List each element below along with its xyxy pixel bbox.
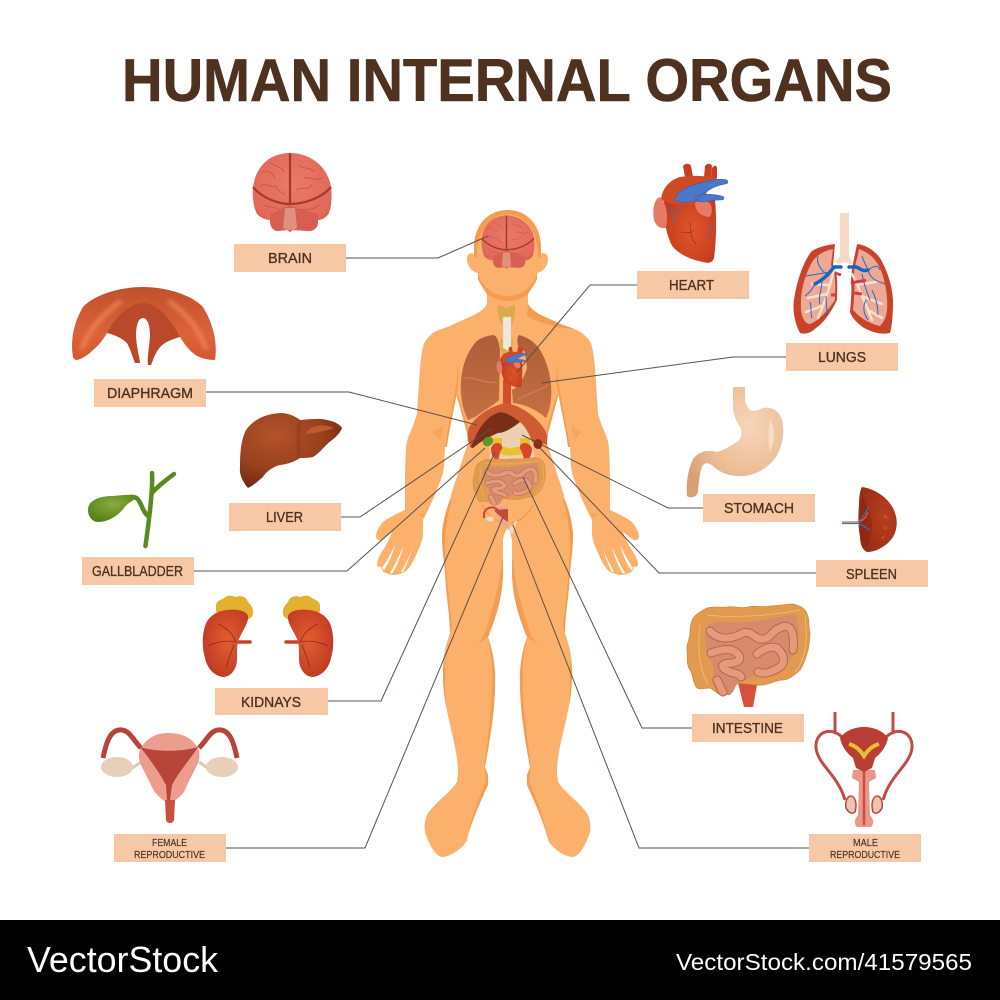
title: HUMAN INTERNAL ORGANS xyxy=(122,47,892,114)
label: heart: HEART xyxy=(669,277,714,294)
male reproductive in body xyxy=(509,521,516,534)
label: kidneys: KIDNAYS xyxy=(241,694,301,711)
label: gallbladder xyxy=(82,557,194,585)
testes xyxy=(846,796,882,813)
label: stomach: STOMACH xyxy=(724,500,794,517)
gallbladder in body xyxy=(481,435,495,448)
trachea xyxy=(835,213,853,264)
icon: stomach xyxy=(687,387,783,497)
label: lungs: LUNGS xyxy=(818,349,866,366)
trachea xyxy=(503,317,511,350)
lungs in body xyxy=(461,335,551,420)
icon: spleen xyxy=(842,487,897,552)
vaginal canal xyxy=(165,800,175,823)
heart in body xyxy=(497,347,527,387)
liver under diaphragm xyxy=(470,412,520,448)
left kidney and adrenal xyxy=(203,596,253,677)
leader lines xyxy=(194,236,816,848)
pulmonary veins xyxy=(675,179,728,202)
label: gallbladder: GALLBLADDER xyxy=(92,563,183,580)
bladder and prostate xyxy=(840,727,888,772)
label: liver: LIVER xyxy=(266,509,303,526)
icon: female reproductive organs xyxy=(101,730,238,823)
lung shading xyxy=(463,378,549,400)
right kidney and adrenal xyxy=(283,596,333,677)
right lung xyxy=(850,244,893,334)
label: kidneys xyxy=(215,688,328,715)
label: spleen: SPLEEN xyxy=(846,566,897,583)
icon: male reproductive organs xyxy=(816,712,912,827)
icon: intestine with rectum xyxy=(687,604,810,707)
pulmonary arteries xyxy=(815,267,868,284)
aortic arch xyxy=(661,176,718,205)
small intestine base xyxy=(705,614,799,695)
human body figure xyxy=(376,210,639,857)
left lung xyxy=(793,244,837,334)
diaphragm central tendon xyxy=(107,303,180,365)
brain in head xyxy=(482,216,534,268)
label: female reproductive: FEMALE xyxy=(152,838,187,849)
colon seam xyxy=(699,610,806,684)
label: intestine xyxy=(692,714,804,742)
label: male reproductive: REPRODUCTIVE xyxy=(830,850,900,861)
label: female reproductive: REPRODUCTIVE xyxy=(134,850,205,861)
label: spleen xyxy=(816,560,928,587)
neck shadow xyxy=(527,304,575,329)
ligaments xyxy=(125,762,215,773)
icon: lungs xyxy=(793,213,893,334)
uterus xyxy=(139,733,200,801)
adrenal glands and pancreas xyxy=(493,438,530,456)
label: lungs xyxy=(786,343,898,371)
left atrium xyxy=(653,197,667,228)
seminal vesicles xyxy=(849,744,879,756)
large and small intestine xyxy=(687,604,810,695)
female reproductive in body xyxy=(484,506,508,528)
small intestine coil outlines xyxy=(710,626,793,692)
label: female reproductive xyxy=(114,834,226,862)
icon: brain xyxy=(253,153,332,232)
label: liver xyxy=(229,503,341,531)
footer watermark bar xyxy=(0,920,1000,1000)
spleen in body xyxy=(534,439,542,449)
diaphragm muscle highlights xyxy=(82,302,206,348)
icon: liver xyxy=(240,413,342,488)
footer watermark bar: VectorStock.com/41579565 xyxy=(676,949,972,975)
spermatic cords xyxy=(816,712,912,800)
thyroid gland xyxy=(498,305,515,325)
kidneys in body xyxy=(491,443,532,460)
ovaries xyxy=(101,757,133,777)
footer watermark bar: VectorStock xyxy=(27,939,219,980)
bronchi pale xyxy=(806,270,882,320)
intestine in body xyxy=(473,458,546,505)
label: brain: BRAIN xyxy=(268,250,312,267)
left half of body with shading xyxy=(376,210,508,857)
descending aorta xyxy=(503,380,511,408)
heart body xyxy=(664,192,716,263)
upper glands xyxy=(500,339,513,358)
icon: heart xyxy=(653,164,728,263)
small intestine coils xyxy=(710,626,793,692)
label: heart xyxy=(637,271,749,299)
right half of body xyxy=(507,210,639,857)
label: intestine: INTESTINE xyxy=(712,720,783,737)
large intestine xyxy=(687,604,810,695)
right atrium xyxy=(695,201,712,217)
label: male reproductive: MALE xyxy=(853,838,878,849)
pulmonary veins xyxy=(831,273,866,295)
urethra xyxy=(863,760,865,825)
beige abdomen region with stomach xyxy=(490,422,535,459)
icon: kidneys xyxy=(203,596,333,677)
label: diaphragm: DIAPHRAGM xyxy=(107,385,193,402)
label: brain xyxy=(234,244,346,272)
rectum xyxy=(738,683,757,707)
uterine cavity xyxy=(140,747,198,800)
coronary vessels xyxy=(670,204,712,238)
label: stomach xyxy=(703,494,815,522)
penis xyxy=(852,770,876,827)
label: diaphragm xyxy=(94,379,206,407)
icon: diaphragm xyxy=(72,287,216,365)
diaphragm in body xyxy=(468,403,547,447)
label: male reproductive xyxy=(809,834,921,862)
icon: gallbladder xyxy=(88,473,174,546)
fallopian tubes xyxy=(103,730,237,758)
aortic branches xyxy=(683,164,717,178)
